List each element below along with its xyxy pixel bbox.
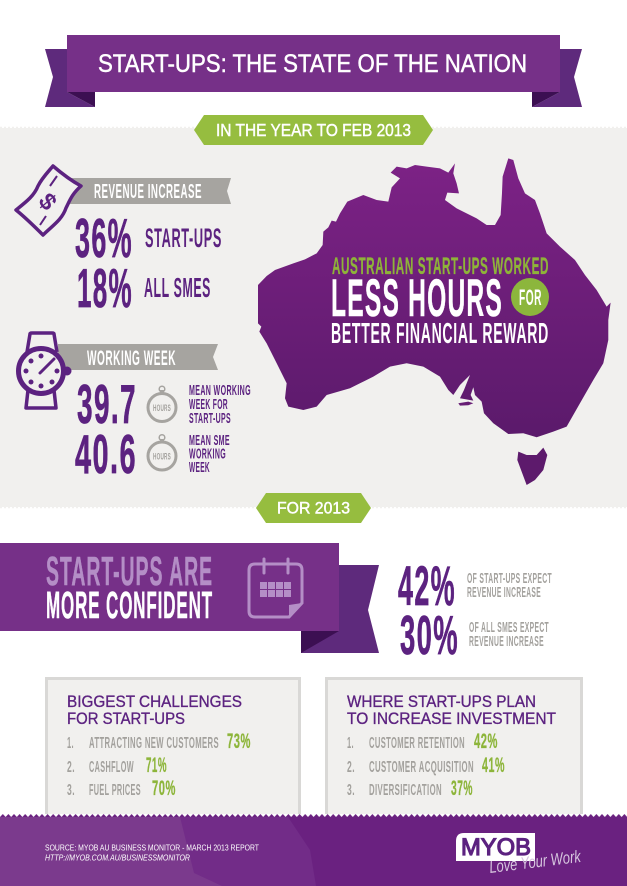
list item 2 (347, 753, 505, 777)
banner: start-ups are more confident: START-UPS ARE (46, 548, 213, 594)
list item 1: 73% (227, 729, 251, 753)
panel heading: FOR START-UPS (67, 709, 185, 728)
heading pill: for 2013: FOR 2013 (277, 500, 350, 518)
stat: 39.7 hours start-ups: WEEK FOR (189, 397, 228, 413)
working week ribbon: WORKING WEEK (87, 347, 176, 370)
MYOB logo (456, 833, 583, 877)
map: Tasmania (517, 448, 547, 485)
MYOB logo: MYOB (461, 834, 531, 861)
title ribbon (45, 35, 582, 107)
list item 1: CUSTOMER RETENTION (369, 735, 465, 752)
MYOB logo: Love Your Work (488, 847, 583, 877)
list item 3: 70% (152, 776, 176, 800)
panel: biggest challenges: 71% (146, 753, 167, 777)
stat: 18% all SMEs: 18% (77, 257, 133, 319)
source text: HTTP://MYOB.COM.AU/BUSINESSMONITOR (45, 854, 190, 862)
list item 1: ATTRACTING NEW CUSTOMERS (89, 735, 219, 752)
icon: wristwatch (18, 333, 72, 408)
heading pill: for 2013 (256, 493, 371, 523)
stat: 42% of start-ups: 42% (398, 554, 456, 617)
panel heading: TO INCREASE INVESTMENT (347, 709, 556, 728)
map headline (331, 253, 549, 350)
banner: start-ups are more confident: MORE CONFIDENT (46, 585, 213, 627)
stat: 36% start-ups: 36% (75, 207, 133, 269)
panel heading: BIGGEST CHALLENGES (67, 692, 242, 711)
list item 2: 2. (67, 759, 75, 776)
stat: 39.7 hours start-ups: START-UPS (189, 411, 231, 427)
list item 2 (67, 753, 167, 777)
list item 1: 1. (67, 735, 74, 752)
list item 3: 3. (67, 782, 75, 799)
section: revenue increase: ALL SMES (144, 272, 211, 303)
banner: start-ups are more confident (0, 543, 379, 653)
working week ribbon (58, 344, 218, 370)
icon: banknote: $ (33, 188, 63, 217)
list item 2: CASHFLOW (89, 759, 134, 776)
for badge (511, 278, 549, 316)
source text: SOURCE: MYOB AU BUSINESS MONITOR - MARCH 2013 REPORT (45, 844, 259, 852)
panel heading: WHERE START-UPS PLAN (347, 692, 536, 711)
list item 3: FUEL PRICES (89, 782, 141, 799)
list item 1 (347, 729, 498, 753)
section: working week (18, 333, 251, 485)
stat: 40.6 hours SMEs: 40.6 (75, 423, 137, 485)
list item 1: 42% (474, 729, 498, 753)
stat: 39.7 hours start-ups (77, 373, 251, 435)
stat: 30% of all SMEs: 30% (400, 604, 459, 666)
list item 1 (67, 729, 251, 753)
stat: 40.6 hours SMEs: WORKING (189, 446, 226, 462)
list item 3: DIVERSIFICATION (369, 782, 442, 799)
stat: 30% of all SMEs: REVENUE INCREASE (469, 634, 544, 650)
map of Australia (258, 158, 611, 485)
panel: biggest challenges (46, 678, 300, 820)
panel: where start-ups plan to invest (326, 678, 582, 820)
heading pill: in the year to Feb 2013: IN THE YEAR TO FEB 2013 (216, 120, 411, 140)
stat: 40.6 hours SMEs: WEEK (189, 460, 210, 476)
section: revenue increase: START-UPS (145, 223, 222, 253)
stat: 42% of start-ups: REVENUE INCREASE (467, 585, 541, 601)
revenue ribbon (70, 178, 231, 204)
title: START-UPS: THE STATE OF THE NATION (98, 50, 527, 78)
panel heading (347, 692, 556, 728)
panel heading (67, 692, 242, 728)
list item 3 (67, 776, 176, 800)
stat: 39.7 hours start-ups: 39.7 (77, 373, 137, 435)
icon: banknote (16, 166, 81, 235)
map: Kangaroo Island (458, 402, 473, 406)
for badge: FOR (519, 285, 542, 310)
list item 2: 2. (347, 759, 355, 776)
icon: calendar (249, 559, 302, 617)
icon: stopwatch (148, 435, 176, 470)
icon: stopwatch (148, 386, 176, 422)
list item 3: 3. (347, 782, 355, 799)
footer (0, 814, 627, 886)
source text (45, 844, 259, 862)
icon: stopwatch: HOURS (153, 403, 171, 414)
text: MEAN WORKING (189, 383, 251, 399)
list item 3 (347, 776, 473, 800)
list item 1: 1. (347, 735, 354, 752)
panel: where start-ups plan to invest: 41% (482, 753, 505, 777)
icon: stopwatch: HOURS (153, 452, 171, 462)
list item 2: CUSTOMER ACQUISITION (369, 759, 474, 776)
panel: year to Feb 2013 background (0, 128, 627, 507)
section: revenue increase (16, 166, 231, 319)
section: working week: MEAN SME (189, 433, 230, 449)
heading pill: in the year to Feb 2013 (194, 115, 433, 145)
panel: where start-ups plan to invest: 37% (451, 776, 473, 800)
revenue ribbon: REVENUE INCREASE (94, 181, 202, 203)
